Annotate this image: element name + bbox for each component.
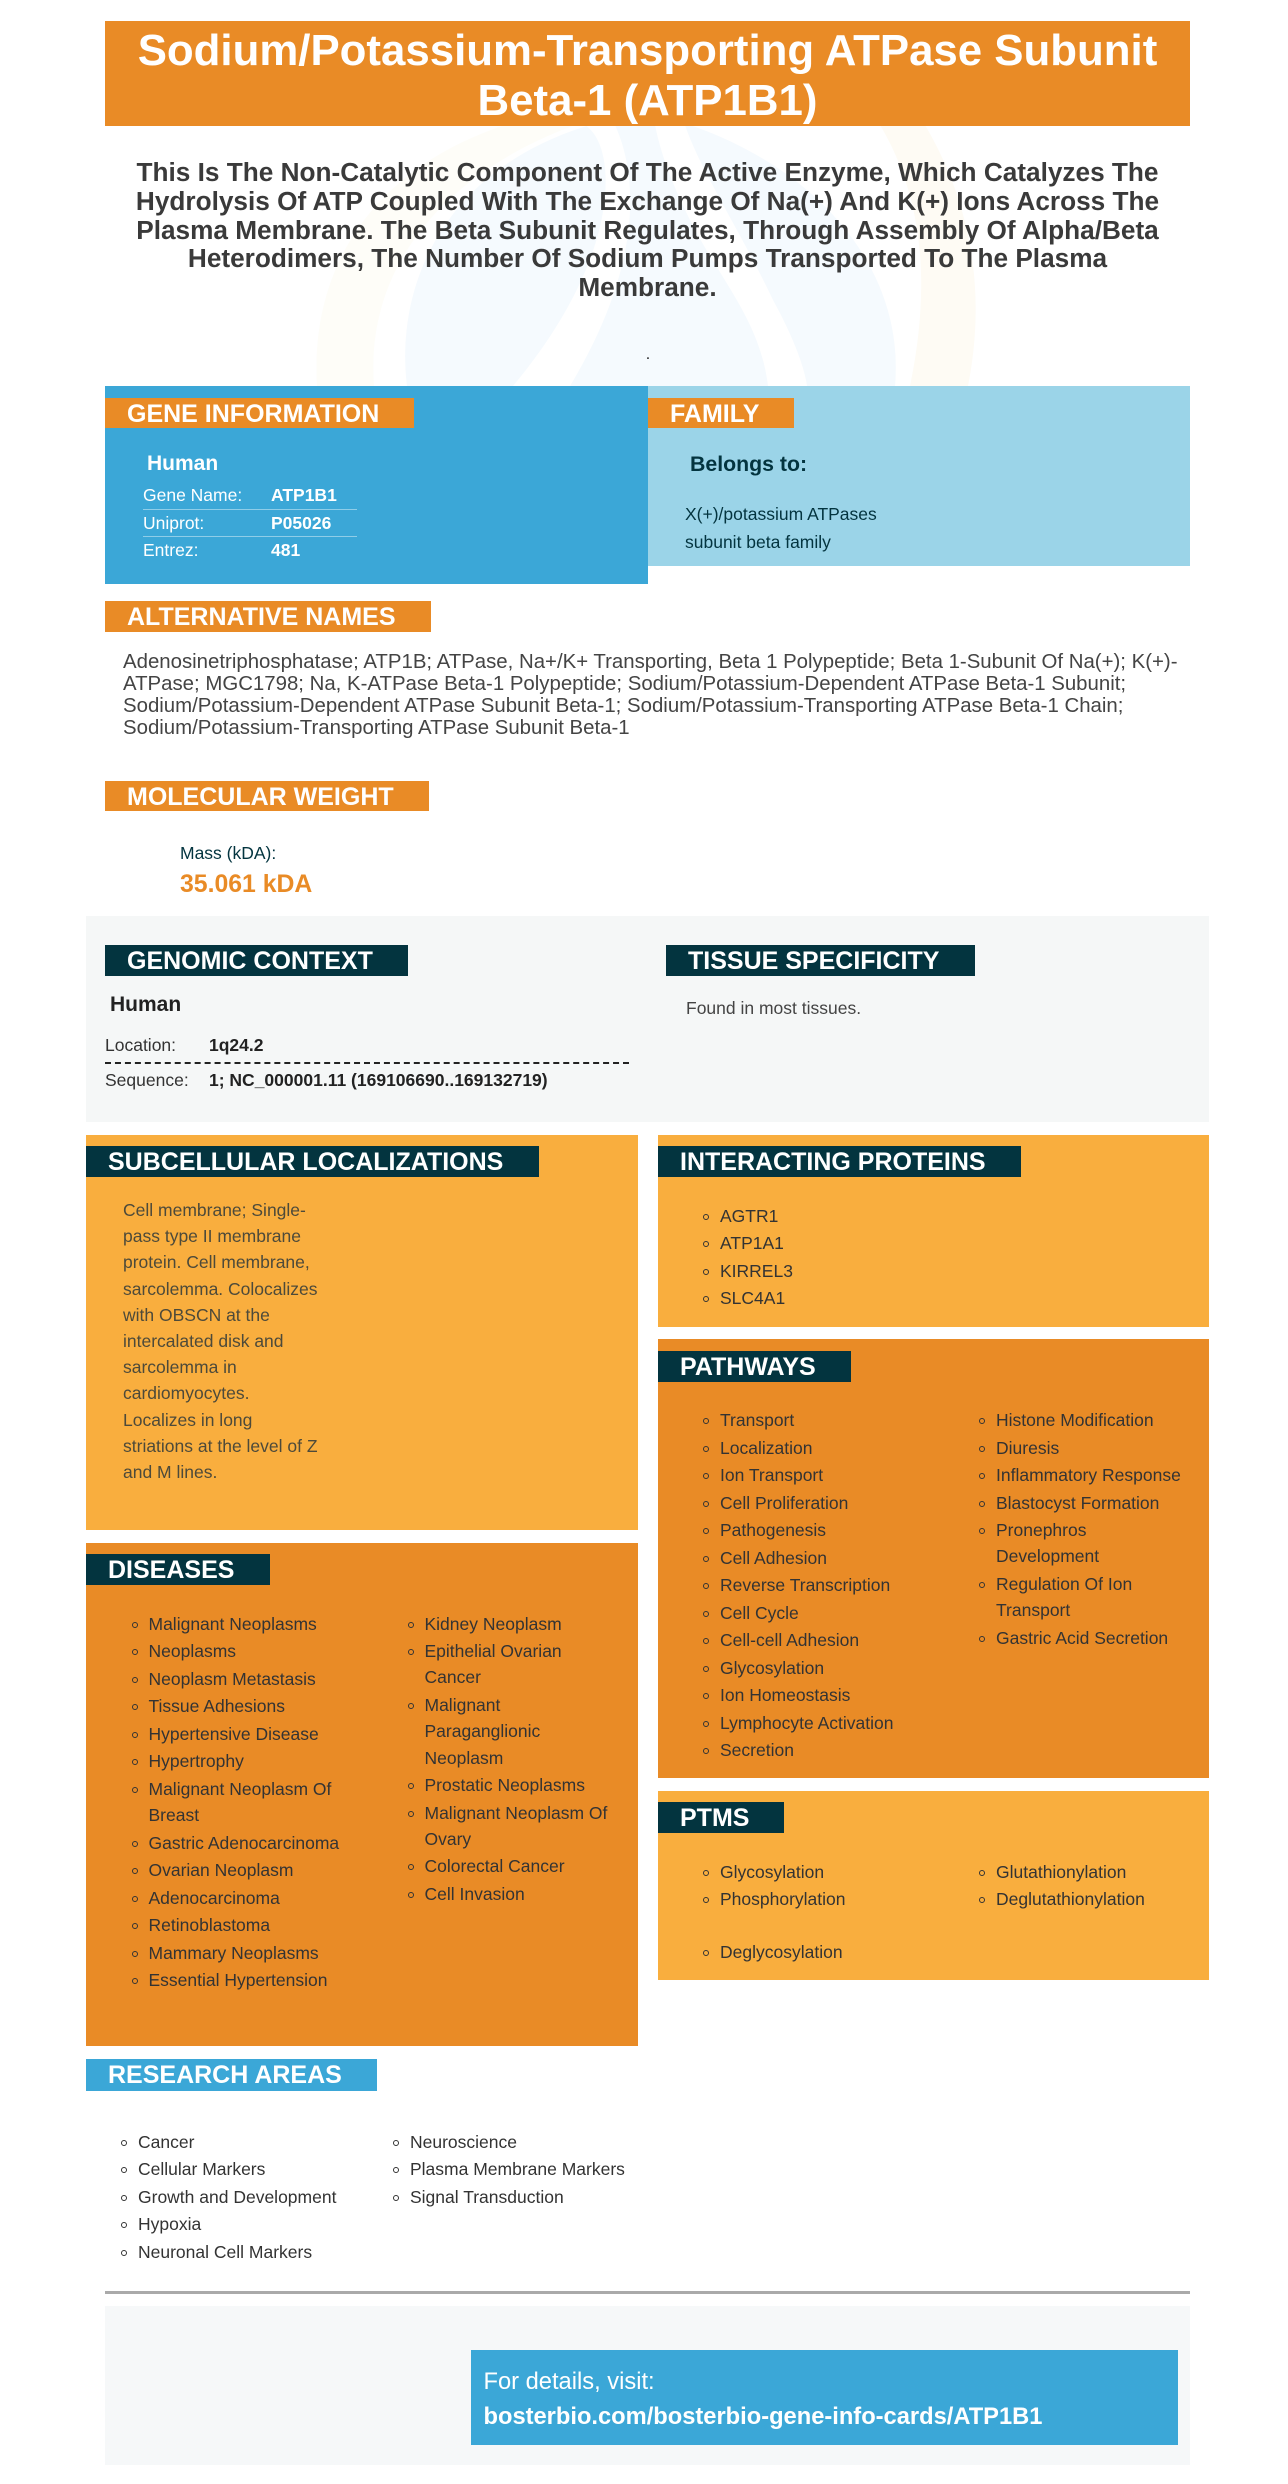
pathways column 1 bbox=[703, 1410, 893, 1760]
diseases column 1 bbox=[132, 1614, 340, 1990]
location row: Location: bbox=[105, 1035, 176, 1055]
localization text: Cell membrane; Single- bbox=[123, 1200, 306, 1220]
diseases column 2: Prostatic Neoplasms bbox=[424, 1775, 585, 1795]
panel: gene information bbox=[105, 386, 648, 584]
diseases column 2: Malignant Neoplasm Of bbox=[424, 1803, 607, 1823]
subtitle description bbox=[136, 157, 1159, 302]
heading: pathways: PATHWAYS bbox=[680, 1353, 816, 1381]
diseases column 1: Hypertensive Disease bbox=[148, 1724, 319, 1744]
pathways column 1: Pathogenesis bbox=[720, 1520, 826, 1540]
diseases column 1: Breast bbox=[148, 1805, 199, 1825]
pathways column 2: Regulation Of Ion bbox=[996, 1574, 1132, 1594]
uniprot row bbox=[143, 510, 357, 537]
panel: family bbox=[648, 386, 1190, 566]
pathways column 1: Cell-cell Adhesion bbox=[720, 1630, 859, 1650]
localization text: striations at the level of Z bbox=[123, 1436, 318, 1456]
localization text: cardiomyocytes. bbox=[123, 1383, 249, 1403]
research areas column 2 bbox=[393, 2132, 625, 2207]
callout: details link: For details, visit: bbox=[484, 2369, 655, 2395]
pathways column 1: Transport bbox=[720, 1410, 794, 1430]
pathways column 1: Lymphocyte Activation bbox=[720, 1712, 893, 1732]
pathways column 1: Reverse Transcription bbox=[720, 1575, 890, 1595]
subtitle description: Membrane. bbox=[578, 272, 717, 302]
diseases column 1: Malignant Neoplasm Of bbox=[148, 1779, 331, 1799]
panel: pathways bbox=[658, 1339, 1209, 1778]
PTMs column 1 bbox=[703, 1862, 846, 1962]
localization text: Localizes in long bbox=[123, 1410, 252, 1430]
pathways column 1: Cell Adhesion bbox=[720, 1548, 827, 1568]
panel: subcellular localizations bbox=[86, 1135, 638, 1530]
PTMs column 2: Deglutathionylation bbox=[996, 1889, 1145, 1909]
diseases column 2: Epithelial Ovarian bbox=[424, 1641, 562, 1661]
research areas column 2: Neuroscience bbox=[410, 2132, 517, 2152]
research areas column 1: Neuronal Cell Markers bbox=[138, 2242, 312, 2262]
heading: gene information: GENE INFORMATION bbox=[127, 400, 379, 428]
PTMs column 1: Phosphorylation bbox=[720, 1889, 846, 1909]
localization text: sarcolemma. Colocalizes bbox=[123, 1279, 318, 1299]
heading: subcellular localizations: SUBCELLULAR LOCALIZATIONS bbox=[108, 1148, 503, 1176]
heading: family bbox=[648, 398, 794, 428]
localization text: protein. Cell membrane, bbox=[123, 1252, 310, 1272]
diseases column 1: Neoplasm Metastasis bbox=[148, 1668, 316, 1688]
heading: pathways bbox=[658, 1351, 851, 1382]
diseases column 2: Colorectal Cancer bbox=[424, 1856, 565, 1876]
sequence row: Sequence: bbox=[105, 1070, 189, 1090]
species label: Human bbox=[147, 452, 218, 475]
gene name row bbox=[143, 482, 357, 510]
tissue specificity text: Found in most tissues. bbox=[686, 998, 861, 1018]
protein list: AGTR1 bbox=[720, 1206, 778, 1226]
family text: X(+)/potassium ATPases bbox=[685, 504, 877, 524]
diseases column 1: Tissue Adhesions bbox=[148, 1696, 285, 1716]
pathways column 2: Transport bbox=[996, 1600, 1070, 1620]
pathways column 2: Pronephros bbox=[996, 1520, 1086, 1540]
alternative names text: Sodium/Potassium-Transporting ATPase Subunit Beta-1 bbox=[123, 717, 630, 739]
PTMs column 1: Deglycosylation bbox=[720, 1942, 843, 1962]
subtitle description: Plasma Membrane. The Beta Subunit Regulates, Through Assembly Of Alpha/Beta bbox=[136, 215, 1159, 245]
diseases column 2: Ovary bbox=[424, 1829, 471, 1849]
localization text: intercalated disk and bbox=[123, 1331, 284, 1351]
pathways column 2: Blastocyst Formation bbox=[996, 1492, 1159, 1512]
research areas column 1: Cellular Markers bbox=[138, 2159, 265, 2179]
pathways column 1: Ion Transport bbox=[720, 1465, 823, 1485]
diseases column 1: Adenocarcinoma bbox=[148, 1888, 280, 1908]
panel: diseases bbox=[86, 1543, 638, 2046]
heading: diseases bbox=[86, 1554, 270, 1585]
diseases column 2 bbox=[408, 1614, 608, 1904]
callout: details link bbox=[471, 2350, 1178, 2445]
heading: family: FAMILY bbox=[670, 400, 759, 428]
heading: genomic context: GENOMIC CONTEXT bbox=[127, 947, 373, 975]
diseases column 1: Gastric Adenocarcinoma bbox=[148, 1833, 339, 1853]
alternative names text: Sodium/Potassium-Dependent ATPase Subunit Beta-1; Sodium/Potassium-Transporting ATPase Beta-1 Chain; bbox=[123, 695, 1123, 717]
heading: research areas: RESEARCH AREAS bbox=[108, 2061, 342, 2089]
title banner: Beta-1 (ATP1B1) bbox=[478, 76, 817, 125]
entrez row: 481 bbox=[271, 540, 300, 560]
pathways column 2: Development bbox=[996, 1546, 1099, 1566]
research areas column 2: Plasma Membrane Markers bbox=[410, 2159, 625, 2179]
entrez row: Entrez: bbox=[143, 540, 198, 560]
protein list: SLC4A1 bbox=[720, 1288, 785, 1308]
PTMs column 2: Glutathionylation bbox=[996, 1862, 1126, 1882]
pathways column 2: Inflammatory Response bbox=[996, 1465, 1181, 1485]
pathways column 1: Glycosylation bbox=[720, 1658, 824, 1678]
diseases column 2: Neoplasm bbox=[424, 1748, 503, 1768]
gene name row: ATP1B1 bbox=[271, 485, 337, 505]
diseases column 1: Hypertrophy bbox=[148, 1751, 244, 1771]
localization text: with OBSCN at the bbox=[123, 1305, 270, 1325]
diseases column 2: Kidney Neoplasm bbox=[424, 1614, 562, 1634]
localization text bbox=[123, 1200, 318, 1482]
title banner: Sodium/Potassium-Transporting ATPase Subunit bbox=[138, 26, 1157, 75]
heading: alternative names: ALTERNATIVE NAMES bbox=[127, 603, 396, 631]
subtitle description: Hydrolysis Of ATP Coupled With The Exchange Of Na(+) And K(+) Ions Across The bbox=[136, 186, 1159, 216]
diseases column 2: Cancer bbox=[424, 1667, 481, 1687]
diseases column 1: Mammary Neoplasms bbox=[148, 1943, 319, 1963]
pathways column 2: Histone Modification bbox=[996, 1410, 1154, 1430]
pathways column 1: Secretion bbox=[720, 1740, 794, 1760]
pathways column 2: Diuresis bbox=[996, 1438, 1059, 1458]
title banner bbox=[105, 21, 1190, 126]
uniprot row: P05026 bbox=[271, 513, 331, 533]
callout: details link: bosterbio.com/bosterbio-gene-info-cards/ATP1B1 bbox=[484, 2404, 1042, 2430]
research areas column 1: Cancer bbox=[138, 2132, 194, 2152]
background watermark logo bbox=[406, 126, 976, 386]
panel: footer bbox=[105, 2306, 1190, 2465]
diseases column 2: Malignant bbox=[424, 1695, 500, 1715]
protein list: KIRREL3 bbox=[720, 1261, 793, 1281]
heading: molecular weight: MOLECULAR WEIGHT bbox=[127, 783, 394, 811]
pathways column 2: Gastric Acid Secretion bbox=[996, 1628, 1168, 1648]
heading: PTMs bbox=[658, 1802, 784, 1833]
mass value: 35.061 kDA bbox=[180, 871, 312, 898]
diseases column 1: Malignant Neoplasms bbox=[148, 1614, 317, 1634]
uniprot row: Uniprot: bbox=[143, 513, 204, 533]
diseases column 1: Essential Hypertension bbox=[148, 1970, 327, 1990]
heading: diseases: DISEASES bbox=[108, 1556, 234, 1584]
panel: genomic context and tissue specificity bbox=[86, 916, 1209, 1122]
mass label: Mass (kDA): bbox=[180, 843, 276, 863]
alternative names text: ATPase; MGC1798; Na, K-ATPase Beta-1 Polypeptide; Sodium/Potassium-Dependent ATPase Beta-1 Subunit; bbox=[123, 673, 1126, 695]
alternative names text bbox=[123, 651, 1178, 739]
species label: Human bbox=[110, 993, 181, 1016]
diseases column 1: Ovarian Neoplasm bbox=[148, 1860, 293, 1880]
pathways column 1: Ion Homeostasis bbox=[720, 1685, 850, 1705]
diseases column 1: Retinoblastoma bbox=[148, 1915, 270, 1935]
family text: subunit beta family bbox=[685, 532, 831, 552]
gene name row: Gene Name: bbox=[143, 485, 242, 505]
localization text: sarcolemma in bbox=[123, 1357, 237, 1377]
belongs to label: Belongs to: bbox=[690, 452, 807, 476]
subtitle description: Heterodimers, The Number Of Sodium Pumps Transported To The Plasma bbox=[188, 243, 1107, 273]
location row bbox=[105, 1032, 629, 1064]
PTMs column 2 bbox=[979, 1862, 1145, 1909]
protein list: ATP1A1 bbox=[720, 1233, 784, 1253]
panel: interacting proteins bbox=[658, 1135, 1209, 1327]
research areas column 1 bbox=[121, 2132, 336, 2262]
research areas column 1: Hypoxia bbox=[138, 2214, 201, 2234]
pathways column 1: Cell Proliferation bbox=[720, 1492, 848, 1512]
family text bbox=[685, 504, 877, 552]
research areas column 2: Signal Transduction bbox=[410, 2187, 564, 2207]
subtitle description: This Is The Non-Catalytic Component Of The Active Enzyme, Which Catalyzes The bbox=[137, 157, 1158, 187]
location row: 1q24.2 bbox=[209, 1035, 263, 1055]
PTMs column 1: Glycosylation bbox=[720, 1862, 824, 1882]
panel: PTMs bbox=[658, 1791, 1209, 1980]
localization text: pass type II membrane bbox=[123, 1226, 301, 1246]
diseases column 2: Paraganglionic bbox=[424, 1721, 540, 1741]
pathways column 1: Cell Cycle bbox=[720, 1602, 799, 1622]
stray dot: . bbox=[646, 346, 650, 363]
localization text: and M lines. bbox=[123, 1462, 217, 1482]
entrez row bbox=[143, 540, 300, 560]
pathways column 2 bbox=[979, 1410, 1181, 1648]
sequence row: 1; NC_000001.11 (169106690..169132719) bbox=[209, 1070, 548, 1090]
alternative names text: Adenosinetriphosphatase; ATP1B; ATPase, Na+/K+ Transporting, Beta 1 Polypeptide; Beta 1-Subunit Of Na(+); K(+)- bbox=[123, 651, 1178, 673]
pathways column 1: Localization bbox=[720, 1438, 812, 1458]
diseases column 2: Cell Invasion bbox=[424, 1884, 525, 1904]
protein list bbox=[703, 1206, 793, 1308]
heading: interacting proteins: INTERACTING PROTEINS bbox=[680, 1148, 986, 1176]
heading: PTMs: PTMS bbox=[680, 1804, 749, 1832]
diseases column 1: Neoplasms bbox=[148, 1641, 236, 1661]
research areas column 1: Growth and Development bbox=[138, 2187, 336, 2207]
heading: tissue specificity: TISSUE SPECIFICITY bbox=[688, 947, 939, 975]
